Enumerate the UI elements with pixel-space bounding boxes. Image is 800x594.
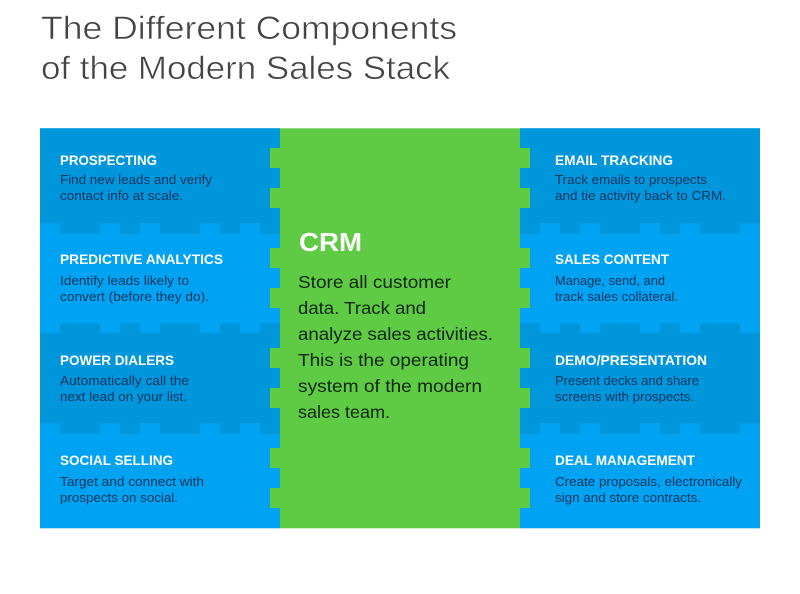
title: The Different Components <box>41 10 457 46</box>
block: demo/presentation: screens with prospects. <box>555 389 694 404</box>
block: prospecting: contact info at scale. <box>60 188 183 203</box>
block: sales content <box>555 251 678 304</box>
block: prospecting <box>60 152 213 203</box>
block: predictive analytics: Identify leads likely to <box>60 273 189 288</box>
block: predictive analytics: convert (before they do). <box>60 289 209 304</box>
block: demo/presentation <box>555 352 707 404</box>
block: prospecting: PROSPECTING <box>60 152 157 168</box>
CRM text: Store all customer <box>298 272 451 292</box>
block: predictive analytics: PREDICTIVE ANALYTICS <box>60 251 223 267</box>
block: demo/presentation: Present decks and share <box>555 373 699 388</box>
block: social selling: prospects on social. <box>60 490 178 505</box>
CRM text: This is the operating <box>298 350 469 370</box>
block: sales content: SALES CONTENT <box>555 251 669 267</box>
block: sales content: Manage, send, and <box>555 273 665 288</box>
block: deal management: sign and store contracts. <box>555 490 701 505</box>
title: of the Modern Sales Stack <box>41 50 451 86</box>
block: email tracking: EMAIL TRACKING <box>555 152 673 168</box>
title <box>41 10 457 86</box>
CRM text <box>298 227 493 422</box>
block: prospecting: Find new leads and verify <box>60 172 213 187</box>
block: social selling <box>60 452 204 505</box>
block: deal management <box>555 452 743 505</box>
block: social selling: Target and connect with <box>60 474 204 489</box>
block: email tracking: and tie activity back to CRM. <box>555 188 726 203</box>
CRM text: data. Track and <box>298 298 426 318</box>
block: social selling: SOCIAL SELLING <box>60 452 173 468</box>
CRM text: analyze sales activities. <box>298 324 493 344</box>
block: deal management: DEAL MANAGEMENT <box>555 452 695 468</box>
block: power dialers: POWER DIALERS <box>60 352 174 368</box>
block: email tracking: Track emails to prospects <box>555 172 708 187</box>
CRM text: system of the modern <box>298 376 482 396</box>
block: sales content: track sales collateral. <box>555 289 678 304</box>
panel: right column <box>520 128 760 528</box>
panel: left column <box>40 128 280 528</box>
block: demo/presentation: DEMO/PRESENTATION <box>555 352 707 368</box>
CRM text: CRM <box>299 227 362 257</box>
block: power dialers: Automatically call the <box>60 373 189 388</box>
block: deal management: Create proposals, electronically <box>555 474 743 489</box>
block: predictive analytics <box>60 251 223 304</box>
CRM text: sales team. <box>298 402 390 422</box>
block: power dialers: next lead on your list. <box>60 389 187 404</box>
block: email tracking <box>555 152 726 203</box>
block: power dialers <box>60 352 189 404</box>
panel: CRM center with tabs <box>270 128 530 528</box>
